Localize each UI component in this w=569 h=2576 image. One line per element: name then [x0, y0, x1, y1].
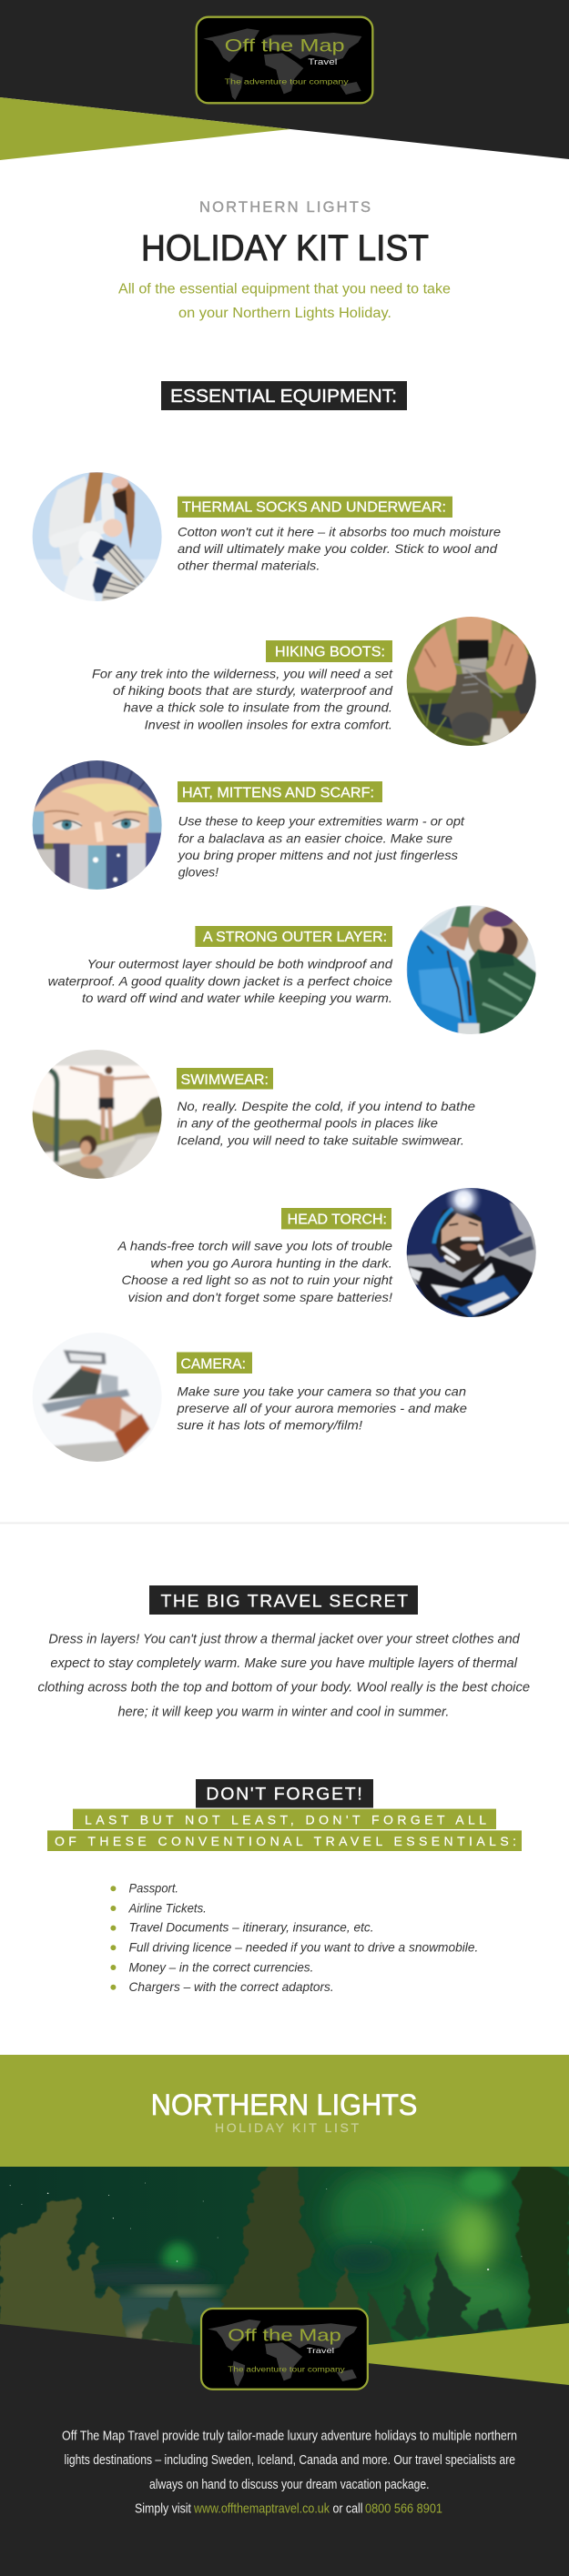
section: swimwear: in any of the geothermal pools in places like: [177, 1116, 438, 1131]
logo: Off the Map Travel (top): The adventure tour company: [225, 77, 350, 86]
footer text: [62, 2429, 517, 2516]
photo: hand holding instant camera: [33, 1333, 162, 1462]
photo: geothermal pool bathers: [33, 1050, 162, 1179]
subheading banner: [47, 1809, 522, 1851]
heading: Essential Equipment: [161, 381, 407, 410]
list: travel essentials: Passport.: [129, 1881, 178, 1896]
list: travel essentials: Airline Tickets.: [128, 1900, 207, 1915]
section: head torch: HEAD TORCH:: [288, 1213, 387, 1228]
heading: Essential Equipment: ESSENTIAL EQUIPMENT:: [170, 387, 397, 407]
section: head torch: vision and don't forget some spare batteries!: [128, 1290, 392, 1304]
section: hat, mittens and scarf: gloves!: [178, 865, 218, 880]
section: camera: preserve all of your aurora memories - and make: [176, 1401, 467, 1415]
photo: couple in outer jackets: [406, 905, 536, 1034]
photo: hands tying hiking boot: [406, 617, 536, 746]
paragraph: dress in layers: here; it will keep you warm in winter and cool in summer.: [118, 1705, 449, 1719]
heading: The Big Travel Secret: THE BIG TRAVEL SECRET: [160, 1591, 408, 1611]
section: hat, mittens and scarf: [178, 781, 465, 880]
subtitle: All of the essential equipment that you need to take: [118, 282, 451, 297]
eyebrow: Northern Lights: NORTHERN LIGHTS: [199, 199, 371, 216]
logo: Off the Map Travel (footer): Travel: [307, 2346, 334, 2355]
section: head torch: [117, 1208, 393, 1304]
section: thermal socks and underwear: [178, 497, 501, 573]
logo: Off the Map Travel (footer): The adventure tour company: [228, 2365, 345, 2373]
subheading banner: OF THESE CONVENTIONAL TRAVEL ESSENTIALS:: [55, 1834, 516, 1848]
section: a strong outer layer: [48, 926, 393, 1005]
panel: green footer banner: [0, 2055, 569, 2167]
section: swimwear: Iceland, you will need to take suitable swimwear.: [177, 1132, 464, 1147]
section: hiking boots: have a thick sole to insulate from the ground.: [124, 700, 392, 715]
section: head torch: Choose a red light so as not to ruin your night: [122, 1273, 393, 1287]
section: thermal socks and underwear: and will ultimately make you colder. Stick to wool and: [178, 541, 498, 556]
footer text: or call: [333, 2501, 362, 2516]
title: HOLIDAY KIT LIST: [141, 228, 429, 268]
section: a strong outer layer: to ward off wind and water while keeping you warm.: [82, 991, 392, 1005]
footer text: www.offthemaptravel.co.uk: [193, 2501, 330, 2516]
section: thermal socks and underwear: other thermal materials.: [178, 558, 320, 573]
footer background shapes: [0, 2323, 569, 2576]
list: travel essentials: [110, 1881, 478, 1994]
section: camera: CAMERA:: [180, 1357, 246, 1372]
section: a strong outer layer: Your outermost layer should be both windproof and: [87, 957, 393, 971]
section: thermal socks and underwear: Cotton won't cut it here – it absorbs too much moisture: [178, 524, 501, 538]
section: hiking boots: of hiking boots that are sturdy, waterproof and: [113, 683, 393, 698]
section: a strong outer layer: A STRONG OUTER LAYER:: [203, 930, 387, 945]
logo: Off the Map Travel (top): [197, 17, 372, 103]
section: hiking boots: [92, 640, 393, 731]
section: thermal socks and underwear: THERMAL SOCKS AND UNDERWEAR:: [182, 500, 446, 516]
subtitle: on your Northern Lights Holiday.: [178, 306, 391, 321]
list: travel essentials: Full driving licence – needed if you want to drive a snowmobile.: [129, 1939, 478, 1954]
photo: woman in thermal underwear and socks: [33, 472, 162, 601]
subtitle: [118, 282, 451, 321]
heading: The Big Travel Secret: [149, 1585, 418, 1615]
section: camera: Make sure you take your camera so that you can: [177, 1384, 466, 1398]
panel: green footer banner: HOLIDAY KIT LIST: [215, 2120, 359, 2135]
heading: Don't Forget: [196, 1779, 373, 1808]
logo: Off the Map Travel (footer): [201, 2309, 368, 2390]
section: hat, mittens and scarf: HAT, MITTENS AND SCARF:: [182, 786, 374, 801]
header background: [0, 0, 569, 160]
section: swimwear: [177, 1068, 475, 1147]
paragraph: dress in layers: clothing across both the top and bottom of your body. Wool really is the best choice: [38, 1681, 530, 1696]
section: head torch: when you go Aurora hunting in the dark.: [150, 1255, 392, 1270]
section: hat, mittens and scarf: Use these to keep your extremities warm - or opt: [178, 814, 465, 829]
section: a strong outer layer: waterproof. A good quality down jacket is a perfect choice: [48, 973, 392, 988]
section: hiking boots: Invest in woollen insoles for extra comfort.: [145, 717, 392, 731]
heading: Don't Forget: DON'T FORGET!: [206, 1784, 362, 1804]
list: travel essentials: Travel Documents – itinerary, insurance, etc.: [129, 1920, 373, 1935]
logo: Off the Map Travel (top): Off the Map: [225, 37, 345, 56]
section: camera: sure it has lots of memory/film!: [177, 1417, 362, 1432]
paragraph: dress in layers: Dress in layers! You can't just throw a thermal jacket over your street clothes and: [48, 1632, 521, 1646]
section: hat, mittens and scarf: you bring proper mittens and not just fingerless: [178, 848, 458, 862]
list: travel essentials: Chargers – with the correct adaptors.: [129, 1979, 334, 1994]
panel: green footer banner: NORTHERN LIGHTS: [151, 2088, 417, 2121]
footer text: 0800 566 8901: [365, 2501, 442, 2516]
section: head torch: A hands-free torch will save you lots of trouble: [117, 1239, 392, 1253]
footer text: Simply visit: [135, 2501, 191, 2516]
logo: Off the Map Travel (top): Travel: [308, 57, 337, 66]
section: camera: [176, 1352, 467, 1432]
photo: aurora over snowy forest: [0, 2165, 569, 2392]
section: hiking boots: HIKING BOOTS:: [275, 645, 385, 660]
section: swimwear: No, really. Despite the cold, if you intend to bathe: [177, 1099, 475, 1113]
photo: man with head torch: [406, 1188, 536, 1317]
paragraph: dress in layers: [38, 1632, 530, 1719]
paragraph: dress in layers: expect to stay completely warm. Make sure you have multiple layers of thermal: [50, 1656, 518, 1671]
list: travel essentials: Money – in the correct currencies.: [129, 1959, 313, 1974]
subheading banner: LAST BUT NOT LEAST, DON'T FORGET ALL: [85, 1812, 486, 1826]
photo: woman in hat and scarf: [33, 760, 162, 890]
section: hiking boots: For any trek into the wilderness, you will need a set: [92, 666, 393, 680]
logo: Off the Map Travel (footer): Off the Map: [228, 2327, 341, 2345]
section: hat, mittens and scarf: for a balaclava as an easier choice. Make sure: [178, 830, 452, 845]
section: swimwear: SWIMWEAR:: [180, 1072, 269, 1088]
footer text: always on hand to discuss your dream vacation package.: [149, 2478, 430, 2492]
